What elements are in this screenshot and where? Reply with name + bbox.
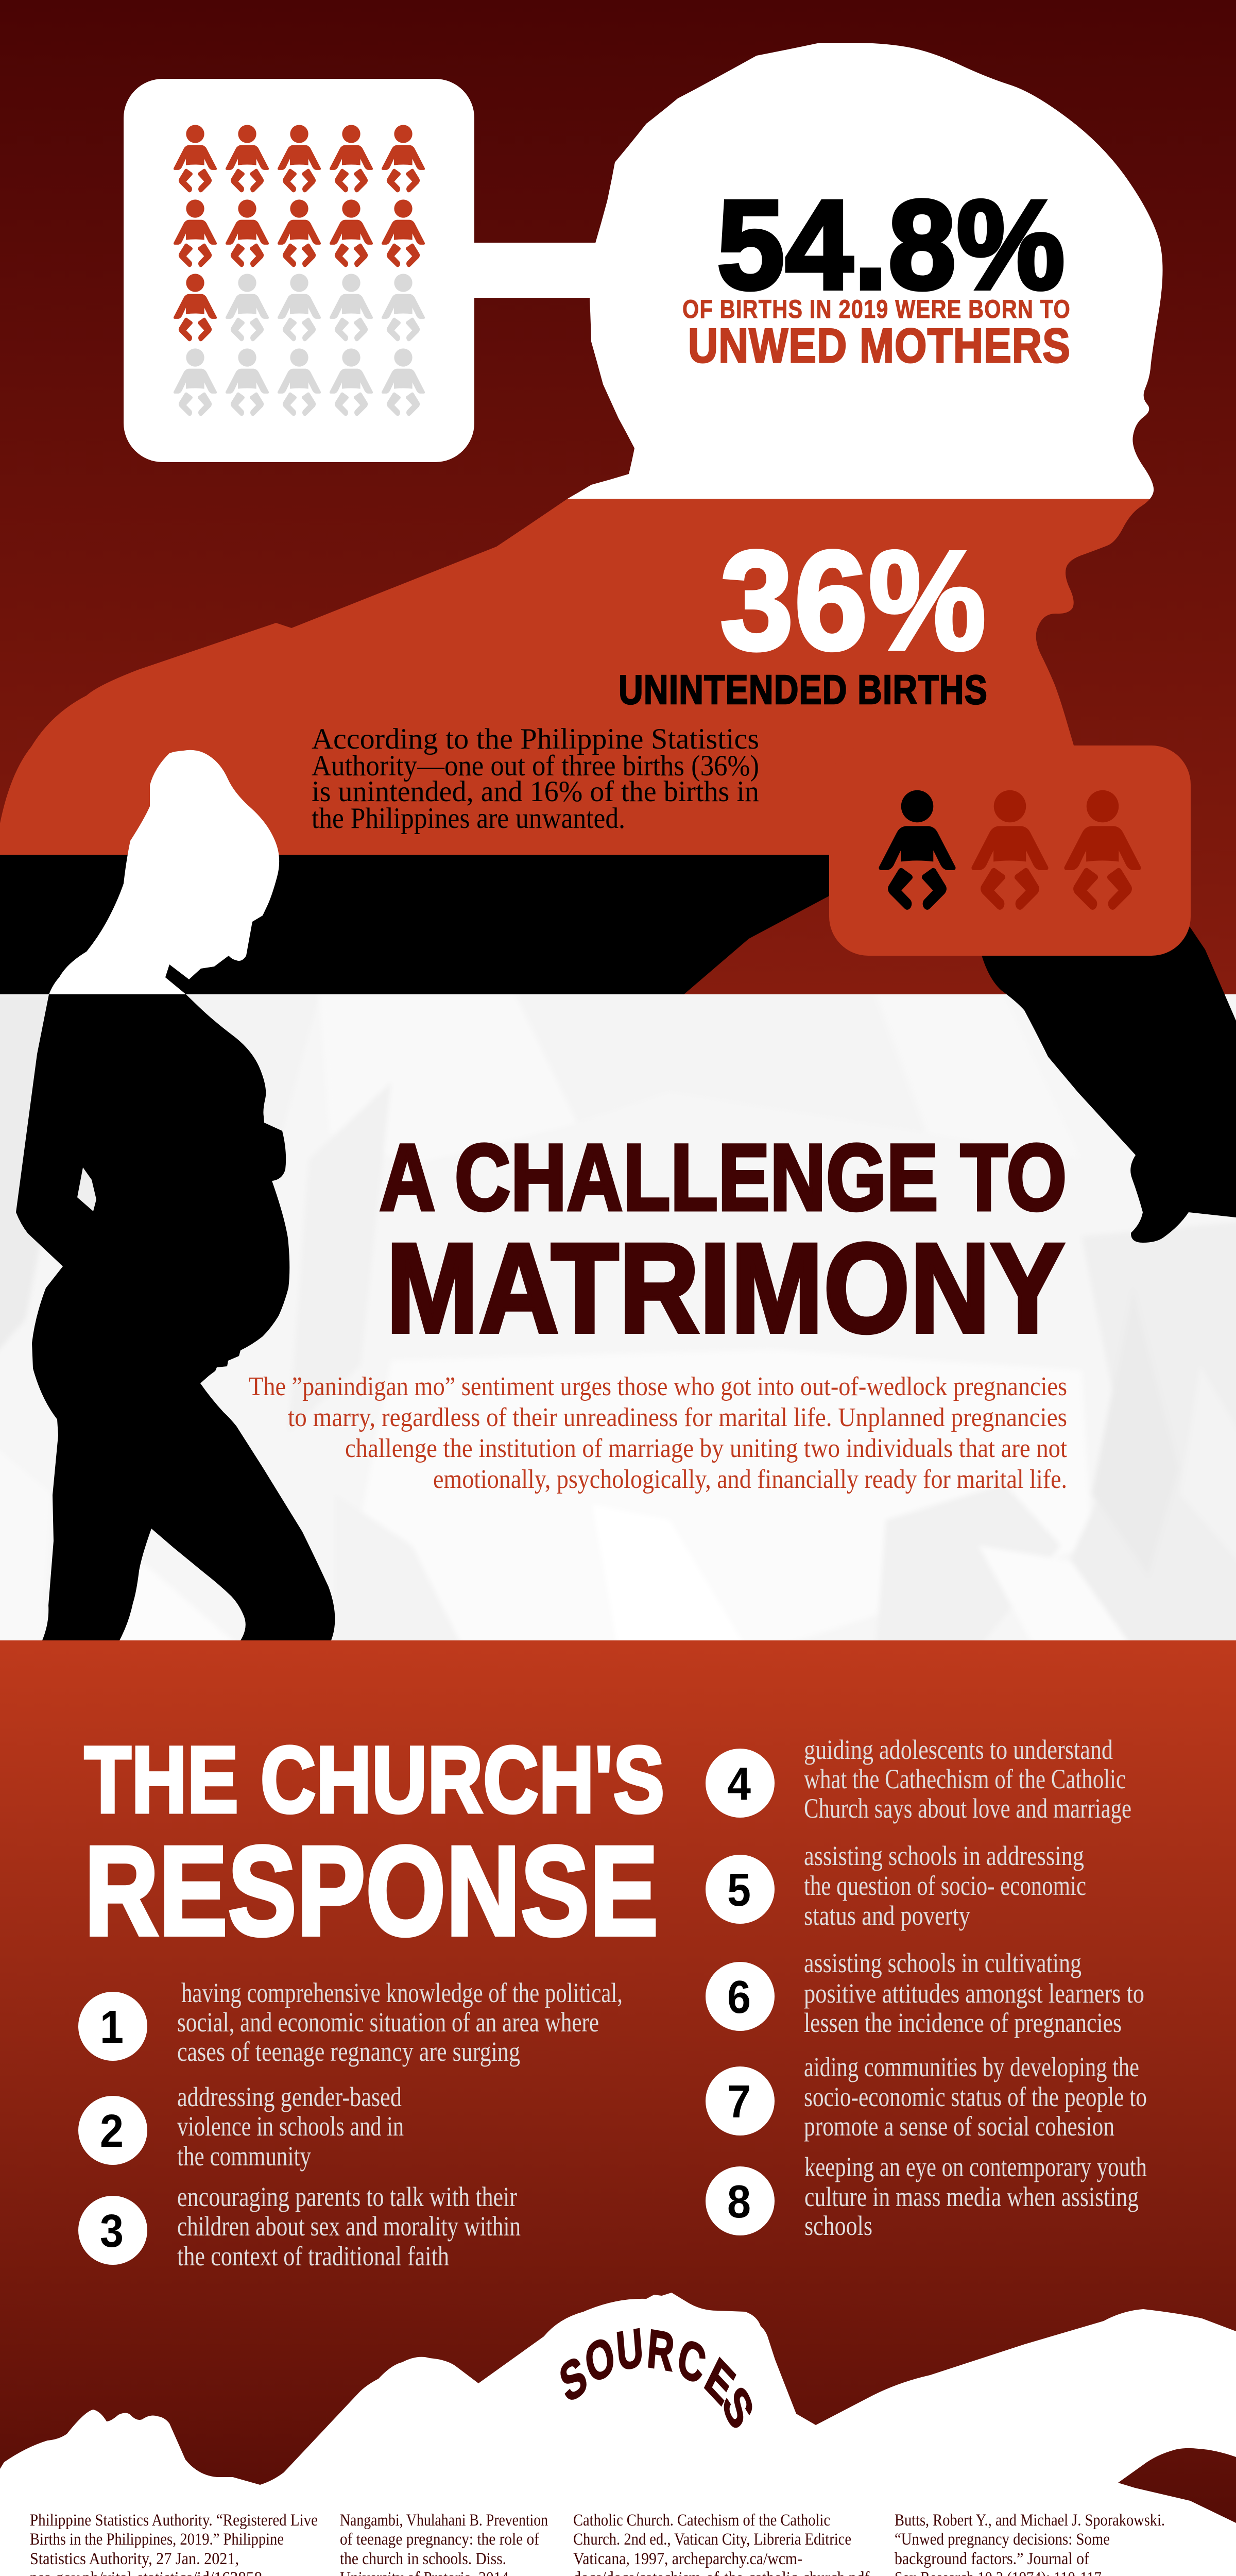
icon: 11 of 20 highlighted babies — [174, 125, 425, 416]
list item 7: socio-economic status of the people to — [804, 2081, 1147, 2112]
icon: three babies — [879, 790, 1141, 910]
text: statistics authority paragraph — [312, 723, 759, 835]
list item 6: positive attitudes amongst learners to — [804, 1978, 1144, 2009]
panel: one in three births card — [829, 745, 1191, 956]
list item 5 — [706, 1840, 1086, 1931]
text: source citations: “Unwed pregnancy decisions: Some — [895, 2530, 1110, 2549]
text: panindigan mo paragraph — [249, 1372, 1067, 1494]
black band shoulder — [0, 855, 829, 994]
stat: 54.8% unwed mothers: OF BIRTHS IN 2019 WERE BORN TO — [682, 295, 1071, 324]
text: source citations: Births in the Philippines, 2019.” Philippine — [30, 2530, 284, 2549]
text: panindigan mo paragraph: to marry, regardless of their unreadiness for marital life. Unplanned pregnancies — [288, 1403, 1067, 1432]
heading: a challenge to matrimony: A CHALLENGE TO — [380, 1125, 1067, 1230]
text: source citations — [30, 2511, 1165, 2576]
list item 7: 7 — [727, 2076, 751, 2128]
text: statistics authority paragraph: is unintended, and 16% of the births in — [312, 775, 759, 808]
list item 6: 6 — [727, 1972, 751, 2023]
heading: a challenge to matrimony — [380, 1125, 1067, 1359]
silhouette: right arm — [978, 927, 1236, 1243]
heading: the church's response: THE CHURCH'S — [84, 1727, 665, 1832]
background: crumpled paper section — [0, 994, 1236, 1649]
text: source citations: Nangambi, Vhulahani B. Prevention — [340, 2511, 548, 2530]
text: source citations: Statistics Authority, 27 Jan. 2021, — [30, 2550, 239, 2568]
list item 3: children about sex and morality within — [177, 2211, 521, 2242]
list item 1: cases of teenage regnancy are surging — [177, 2036, 520, 2067]
background: dark red gradient top section — [0, 0, 1236, 994]
list item 7: aiding communities by developing the — [804, 2052, 1139, 2082]
stat: 36% unintended births — [619, 522, 988, 713]
white mountains footer shape — [0, 2293, 1236, 2576]
text: panindigan mo paragraph: challenge the institution of marriage by uniting two individuals that are not — [345, 1434, 1067, 1463]
list item 4: Church says about love and marriage — [804, 1793, 1131, 1824]
stat: 36% unintended births: UNINTENDED BIRTHS — [619, 667, 988, 713]
list item 6 — [706, 1947, 1144, 2038]
text: source citations: Vaticana, 1997, archeparchy.ca/wcm- — [573, 2550, 802, 2568]
list item 2: violence in schools and in — [177, 2111, 404, 2142]
silhouette: pregnant woman — [16, 750, 335, 1649]
text: source citations: Butts, Robert Y., and Michael J. Sporakowski. — [895, 2511, 1165, 2530]
list item 2 — [78, 2081, 404, 2172]
panel: baby chart card — [124, 79, 598, 462]
list item 1: social, and economic situation of an area where — [177, 2007, 599, 2038]
list item 5: status and poverty — [804, 1900, 970, 1931]
list item 5: assisting schools in addressing — [804, 1840, 1084, 1871]
list item 8: keeping an eye on contemporary youth — [804, 2151, 1147, 2182]
heading: sources arc: SOURCES — [554, 2317, 762, 2439]
list item 8 — [706, 2151, 1147, 2241]
list item 6: lessen the incidence of pregnancies — [804, 2007, 1122, 2038]
stat: 36% unintended births: 36% — [720, 522, 987, 680]
text: source citations: the church in schools. Diss. — [340, 2550, 506, 2568]
list item 2: the community — [177, 2141, 311, 2172]
text: statistics authority paragraph: According to the Philippine Statistics — [312, 723, 759, 755]
text: panindigan mo paragraph: The ”panindigan mo” sentiment urges those who got into out-of-wedlock pregnancies — [249, 1372, 1067, 1401]
list item 7: promote a sense of social cohesion — [804, 2111, 1114, 2142]
stat: 54.8% unwed mothers — [682, 174, 1071, 372]
list item 6: assisting schools in cultivating — [804, 1947, 1082, 1978]
text: panindigan mo paragraph: emotionally, psychologically, and financially ready for marital life. — [433, 1465, 1067, 1494]
list item 7 — [706, 2052, 1147, 2142]
list item 1: having comprehensive knowledge of the political, — [181, 1977, 623, 2008]
background: church section gradient — [0, 1640, 1236, 2576]
list item 8: 8 — [727, 2176, 751, 2228]
text: source citations: background factors.” Journal of — [895, 2550, 1089, 2568]
heading: a challenge to matrimony: MATRIMONY — [386, 1217, 1065, 1359]
list item 3: the context of traditional faith — [177, 2241, 449, 2272]
list item 4: what the Cathechism of the Catholic — [804, 1764, 1126, 1794]
list item 4: guiding adolescents to understand — [804, 1734, 1113, 1765]
text: source citations: Catholic Church. Catechism of the Catholic — [573, 2511, 830, 2530]
list item 1 — [78, 1977, 623, 2067]
heading: the church's response — [84, 1727, 665, 1962]
list item 5: 5 — [727, 1865, 751, 1916]
stat: 54.8% unwed mothers: UNWED MOTHERS — [688, 318, 1071, 372]
list item 3 — [78, 2181, 521, 2272]
list item 3: 3 — [100, 2206, 124, 2257]
silhouette: head in profile — [568, 43, 1163, 499]
list item 1: 1 — [100, 2002, 124, 2053]
list item 2: addressing gender-based — [177, 2081, 402, 2112]
list item 2: 2 — [100, 2106, 124, 2157]
list item 3: encouraging parents to talk with their — [177, 2181, 517, 2212]
list item 4: 4 — [727, 1758, 751, 1810]
text: statistics authority paragraph: Authority—one out of three births (36%) — [312, 750, 759, 782]
list item 8: culture in mass media when assisting — [804, 2181, 1139, 2212]
list item 8: schools — [804, 2210, 872, 2241]
silhouette: neck and shoulder — [0, 499, 1150, 855]
text: source citations: Philippine Statistics Authority. “Registered Live — [30, 2511, 318, 2530]
text: statistics authority paragraph: the Philippines are unwanted. — [312, 802, 625, 835]
list item 5: the question of socio- economic — [804, 1870, 1086, 1901]
text: source citations: of teenage pregnancy: the role of — [340, 2530, 539, 2549]
list item 4 — [706, 1734, 1131, 1824]
heading: the church's response: RESPONSE — [84, 1820, 659, 1962]
text: source citations: Church. 2nd ed., Vatican City, Libreria Editrice — [573, 2530, 851, 2549]
stat: 54.8% unwed mothers: 54.8% — [717, 174, 1066, 316]
